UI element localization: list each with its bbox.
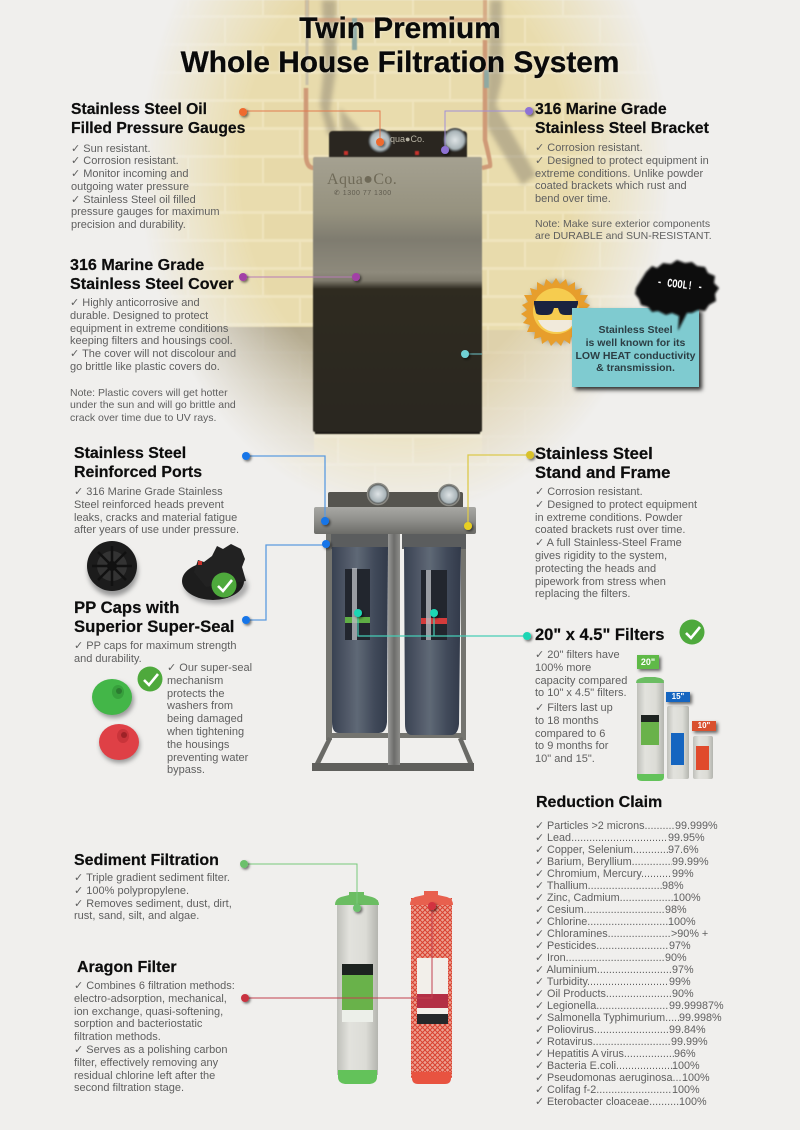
text block: precision and durability.: [71, 219, 186, 231]
heading: Stand and Frame: [535, 462, 670, 482]
cabinet phone number: ✆ 1300 77 1300: [334, 190, 392, 197]
text block: 10" and 15".: [535, 753, 595, 765]
super-seal text: mechanism: [167, 675, 223, 687]
reduction list: 98%: [665, 904, 687, 916]
heading: Stainless Steel Cover: [70, 274, 234, 292]
reduction list: 97%: [669, 940, 691, 952]
text block: filtration methods.: [74, 1031, 161, 1043]
black caps, seal discs and check badges: [85, 541, 704, 766]
size tag 10 inch: 10": [698, 721, 710, 730]
text block: [71, 142, 220, 231]
super-seal text: washers from: [167, 700, 233, 712]
text block: ✓ Triple gradient sediment filter.: [74, 872, 230, 884]
reduction list: 96%: [674, 1048, 696, 1060]
text block: ✓ 100% polypropylene.: [74, 885, 189, 897]
text block: second filtration stage.: [74, 1082, 184, 1094]
text block: ✓ Sun resistant.: [71, 142, 151, 154]
note: [535, 218, 712, 242]
heading: 20" x 4.5" Filters: [535, 626, 664, 644]
text block: durable. Designed to protect: [70, 310, 208, 322]
heading: Superior Super-Seal: [74, 616, 234, 636]
callout: stainless steel heat conductivity: & transmission.: [596, 362, 675, 374]
reduction list: 100%: [682, 1072, 710, 1084]
text block: outgoing water pressure: [71, 181, 189, 193]
text block: sorption and bacteriostatic: [74, 1018, 202, 1030]
reduction list: 100%: [673, 892, 701, 904]
panel: PP caps: [74, 598, 252, 776]
title: Whole House Filtration System: [181, 46, 619, 79]
text block: [535, 649, 627, 699]
panel: aragon filter: [74, 959, 235, 1094]
super-seal text: the housings: [167, 739, 229, 751]
text block: [74, 980, 235, 1094]
reduction list: 100%: [679, 1096, 707, 1108]
text block: electro-adsorption, mechanical,: [74, 993, 227, 1005]
brick wall photo background: [152, 0, 657, 492]
reduction list: 99%: [672, 868, 694, 880]
super-seal text: when tightening: [167, 726, 244, 738]
text block: [535, 142, 709, 205]
reduction list: 99.95%: [668, 832, 705, 844]
panel: marine grade bracket: [535, 101, 712, 242]
text block: ✓ Designed to protect equipment in: [535, 155, 709, 167]
text block: ✓ Stainless Steel oil filled: [71, 194, 196, 206]
heading: Stainless Steel: [74, 445, 186, 462]
reduction list: 98%: [662, 880, 684, 892]
text block: to 9 months for: [535, 740, 608, 752]
text block: coated brackets rust over time.: [535, 524, 685, 536]
size tag 20 inch: 20": [641, 657, 655, 667]
heading: Reinforced Ports: [74, 464, 202, 480]
text block: 100% more: [535, 662, 591, 674]
reduction list: 97.6%: [668, 844, 699, 856]
reduction list: 99%: [669, 976, 691, 988]
text block: ✓ PP caps for maximum strength: [74, 640, 236, 652]
size tag 20 inch: [637, 655, 659, 669]
heading: [70, 256, 234, 292]
text block: Steel reinforced heads prevent: [74, 499, 224, 511]
text block: ion exchange, quasi-softening,: [74, 1006, 223, 1018]
text block: bend over time.: [535, 193, 611, 205]
text block: equipment in extreme conditions: [70, 323, 228, 335]
text block: ✓ The cover will not discolour and: [70, 348, 236, 360]
heading: 316 Marine Grade: [70, 256, 204, 274]
text block: in extreme conditions. Powder: [535, 512, 682, 524]
bracket logo: qua●Co.: [390, 134, 424, 144]
reduction list: 99.99987%: [669, 1000, 724, 1012]
reduction list: 97%: [672, 964, 694, 976]
heading: [71, 101, 245, 137]
super-seal text: bypass.: [167, 764, 205, 776]
reduction list: 99.999%: [675, 820, 718, 832]
text block: keeping filters and housings cool.: [70, 335, 233, 347]
reduction list: 100%: [672, 1060, 700, 1072]
text block: [74, 486, 239, 536]
heading: [535, 101, 709, 136]
note: crack over time due to UV rays.: [70, 412, 216, 424]
heading: [74, 598, 234, 636]
reduction list: 99.99%: [672, 856, 709, 868]
text block: pressure gauges for maximum: [71, 206, 220, 218]
text block: extreme conditions. Unlike powder: [535, 168, 703, 180]
text block: coated brackets which rust and: [535, 180, 687, 192]
reduction list: >90% +: [671, 928, 708, 940]
size tag 15 inch: [666, 692, 690, 702]
text block: go brittle like plastic covers do.: [70, 361, 220, 373]
callout: stainless steel heat conductivity: [572, 308, 699, 387]
super-seal text: ✓ Our super-seal: [167, 662, 252, 674]
text block: capacity compared: [535, 675, 627, 687]
panel: stainless steel cover: [70, 256, 236, 424]
note: are DURABLE and SUN-RESISTANT.: [535, 230, 712, 242]
text block: residual chlorine left after the: [74, 1070, 215, 1082]
text block: compared to 6: [535, 728, 605, 740]
reduction list: 90%: [665, 952, 687, 964]
size tag 15 inch: 15": [672, 692, 684, 701]
text block: [74, 872, 232, 922]
callout: stainless steel heat conductivity: Stainless Steel: [598, 324, 673, 336]
text block: rust, sand, silt, and algae.: [74, 910, 199, 922]
heading: [535, 444, 670, 482]
text block: ✓ Monitor incoming and: [71, 168, 188, 180]
note: Note: Make sure exterior components: [535, 218, 710, 230]
reduction list: 99.998%: [679, 1012, 722, 1024]
heading: Stainless Steel: [535, 444, 653, 463]
panel: pressure gauges: [71, 101, 245, 231]
text block: ✓ Corrosion resistant.: [535, 486, 643, 498]
size tag 10 inch: [692, 721, 716, 731]
heading: PP Caps with: [74, 598, 179, 617]
text block: ✓ Removes sediment, dust, dirt,: [74, 898, 232, 910]
text block: and durability.: [74, 653, 142, 665]
super-seal text: protects the: [167, 688, 224, 700]
title: Twin Premium: [299, 12, 501, 45]
sun mascot with sunglasses: [521, 278, 591, 346]
note: [70, 387, 236, 424]
heading: Reduction Claim: [536, 794, 662, 811]
heading: 316 Marine Grade: [535, 101, 667, 118]
panel: sediment filtration: [74, 852, 232, 922]
reduction list: 100%: [668, 916, 696, 928]
text block: replacing the filters.: [535, 588, 630, 600]
text block: [70, 297, 236, 373]
text block: ✓ Corrosion resistant.: [71, 155, 179, 167]
super-seal text: being damaged: [167, 713, 243, 725]
heading: Aragon Filter: [77, 959, 177, 976]
text block: to 10" x 4.5" filters.: [535, 687, 627, 699]
heading: Stainless Steel Oil: [71, 101, 207, 118]
panel: reinforced ports: [74, 445, 239, 536]
heading: Stainless Steel Bracket: [535, 120, 709, 136]
text block: gives rigidity to the system,: [535, 550, 667, 562]
panel: filter size: [535, 626, 664, 765]
text block: ✓ Serves as a polishing carbon: [74, 1044, 228, 1056]
text block: ✓ Designed to protect equipment: [535, 499, 697, 511]
text block: pipework from stress when: [535, 576, 666, 588]
cabinet logo: Aqua●Co.: [327, 171, 397, 188]
text block: [74, 640, 236, 665]
reduction list: 100%: [672, 1084, 700, 1096]
text block: [535, 486, 697, 600]
callout: stainless steel heat conductivity: is well known for its: [586, 337, 685, 349]
text block: ✓ Corrosion resistant.: [535, 142, 643, 154]
speech bubble: cool: - COOL! -: [656, 275, 704, 295]
text block: to 18 months: [535, 715, 599, 727]
super-seal text: [167, 662, 252, 776]
text block: [535, 702, 613, 765]
text block: ✓ Filters last up: [535, 702, 613, 714]
heading: Sediment Filtration: [74, 852, 219, 869]
text block: filter, effectively removing any: [74, 1057, 218, 1069]
heading: [74, 445, 202, 480]
free standing twin filter system: [312, 482, 476, 771]
text block: protecting the heads and: [535, 563, 656, 575]
text block: leaks, cracks and material fatigue: [74, 512, 237, 524]
note: under the sun and will go brittle and: [70, 399, 236, 411]
title: [180, 12, 619, 80]
callout: stainless steel heat conductivity: LOW HEAT conductivity: [576, 350, 695, 362]
speech bubble: cool: [634, 258, 720, 332]
text block: after years of use under pressure.: [74, 524, 239, 536]
reduction list: 99.99%: [671, 1036, 708, 1048]
wall-mounted cabinet unit: [303, 0, 493, 435]
text block: ✓ 316 Marine Grade Stainless: [74, 486, 223, 498]
text block: ✓ A full Stainless-Steel Frame: [535, 537, 682, 549]
text block: ✓ Combines 6 filtration methods:: [74, 980, 235, 992]
note: Note: Plastic covers will get hotter: [70, 387, 228, 399]
text block: ✓ 20" filters have: [535, 649, 620, 661]
reduction list: 90%: [672, 988, 694, 1000]
super-seal text: preventing water: [167, 752, 248, 764]
text block: ✓ Highly anticorrosive and: [70, 297, 200, 309]
heading: Filled Pressure Gauges: [71, 120, 245, 136]
panel: stand and frame: [535, 444, 697, 600]
reduction list: 99.84%: [669, 1024, 706, 1036]
